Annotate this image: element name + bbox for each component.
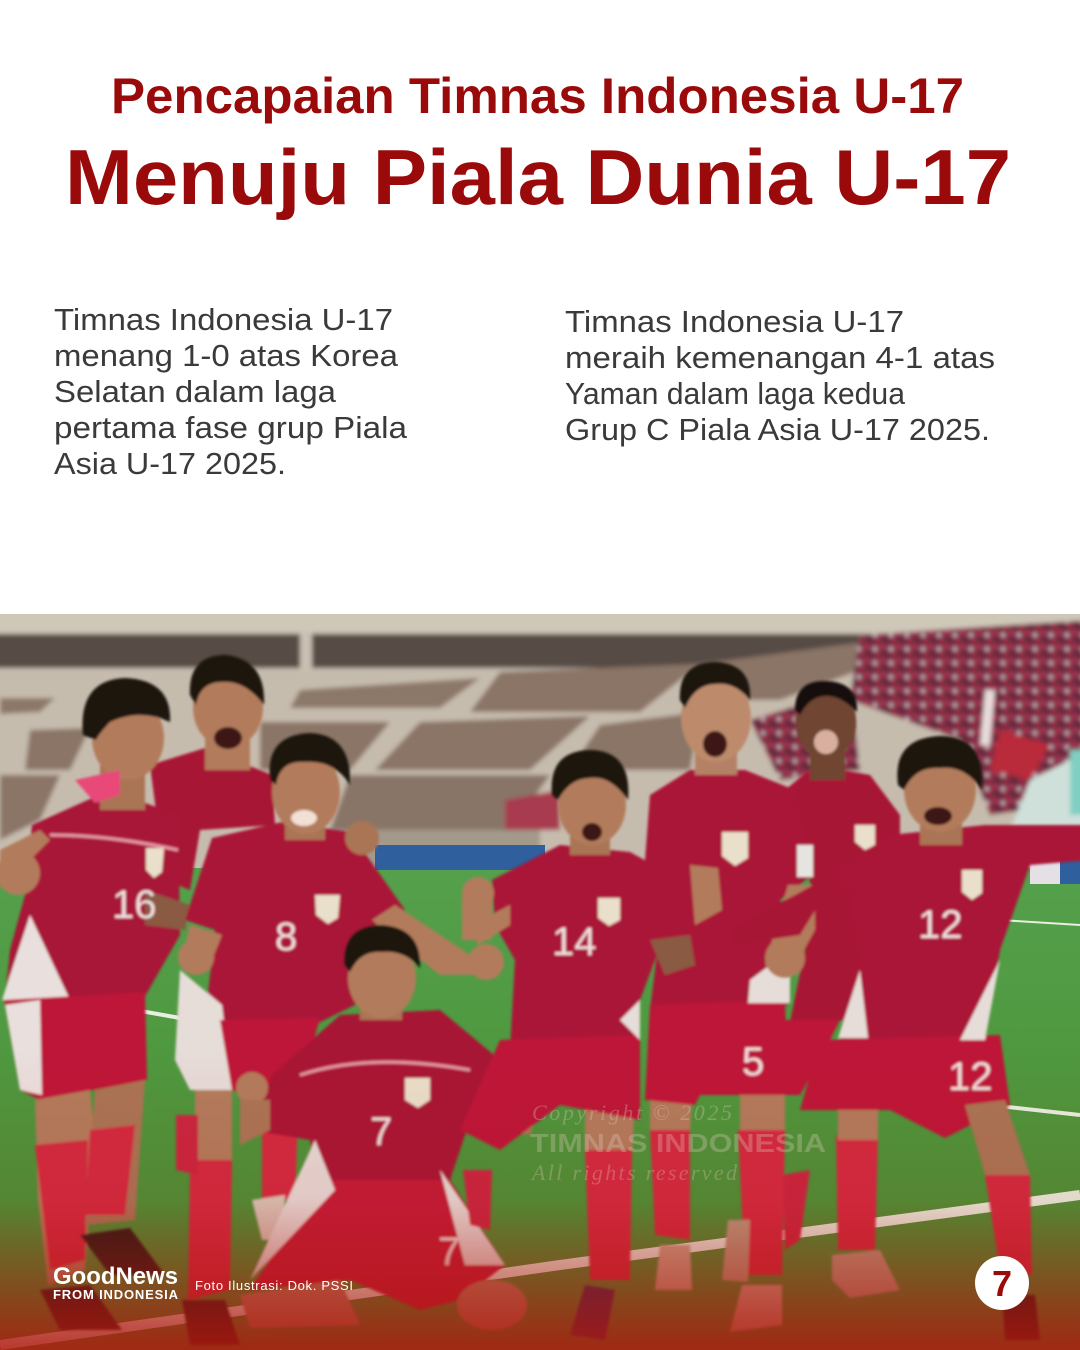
player 4, number 7 kneeling: 7	[370, 1110, 392, 1154]
player 3, number 8	[175, 733, 504, 1345]
player 8, number 12: 12	[918, 903, 962, 947]
player 8, number 12: 12	[948, 1055, 992, 1099]
page number badge	[975, 1256, 1029, 1310]
player 6, number 5: 5	[742, 1040, 764, 1084]
player 8, number 12	[770, 734, 1080, 1340]
text block: match against Korea Selatan: Selatan dalam laga	[54, 374, 337, 409]
text block: match against Yaman: Yaman dalam laga kedua	[565, 376, 906, 411]
photo: team celebrating in the stadium	[0, 606, 1080, 1350]
player 3, number 8: 8	[275, 915, 297, 959]
watermark: All rights reserved	[530, 1160, 738, 1185]
player 5, number 14: 14	[552, 920, 596, 964]
title: Pencapaian Timnas Indonesia U-17	[111, 68, 964, 124]
stadium background	[0, 606, 1080, 884]
logo: GoodNews from Indonesia	[53, 1263, 179, 1302]
page number badge: 7	[992, 1263, 1012, 1304]
text block: match against Yaman	[565, 304, 995, 447]
player 6, number 5	[645, 662, 815, 1332]
player 1, number 16: 16	[112, 883, 156, 927]
bottom red gradient overlay	[0, 1106, 1080, 1350]
text block: match against Korea Selatan: Asia U-17 2025.	[54, 446, 286, 481]
player 1, number 16	[0, 678, 190, 1330]
text block: match against Korea Selatan: menang 1-0 atas Korea	[54, 338, 399, 373]
watermark: Copyright © 2025	[532, 1100, 732, 1125]
pitch	[0, 868, 1080, 1350]
logo: GoodNews from Indonesia: FROM INDONESIA	[53, 1287, 179, 1302]
player 4, number 7 kneeling: 7	[438, 1230, 460, 1274]
pitch lines	[0, 920, 1080, 1345]
player 7, back right	[780, 681, 900, 1298]
photo credit: Foto Ilustrasi: Dok. PSSI	[195, 1278, 353, 1293]
watermark: TIMNAS INDONESIA	[530, 1128, 826, 1158]
players	[0, 655, 1080, 1345]
player 2 (back left)	[150, 655, 275, 890]
player 4, number 7 kneeling	[236, 925, 535, 1330]
title	[65, 68, 1011, 221]
watermark	[530, 1100, 826, 1185]
text block: match against Korea Selatan: Timnas Indonesia U-17	[54, 302, 393, 337]
text block: match against Korea Selatan	[54, 302, 408, 481]
player 5, number 14	[460, 748, 662, 1340]
text block: match against Korea Selatan: pertama fase grup Piala	[54, 410, 408, 445]
text block: match against Yaman: Timnas Indonesia U-17	[565, 304, 904, 339]
text block: match against Yaman: Grup C Piala Asia U-17 2025.	[565, 412, 990, 447]
logo: GoodNews from Indonesia: GoodNews	[53, 1263, 178, 1290]
title: Menuju Piala Dunia U-17	[65, 133, 1011, 221]
text block: match against Yaman: meraih kemenangan 4-1 atas	[565, 340, 995, 375]
